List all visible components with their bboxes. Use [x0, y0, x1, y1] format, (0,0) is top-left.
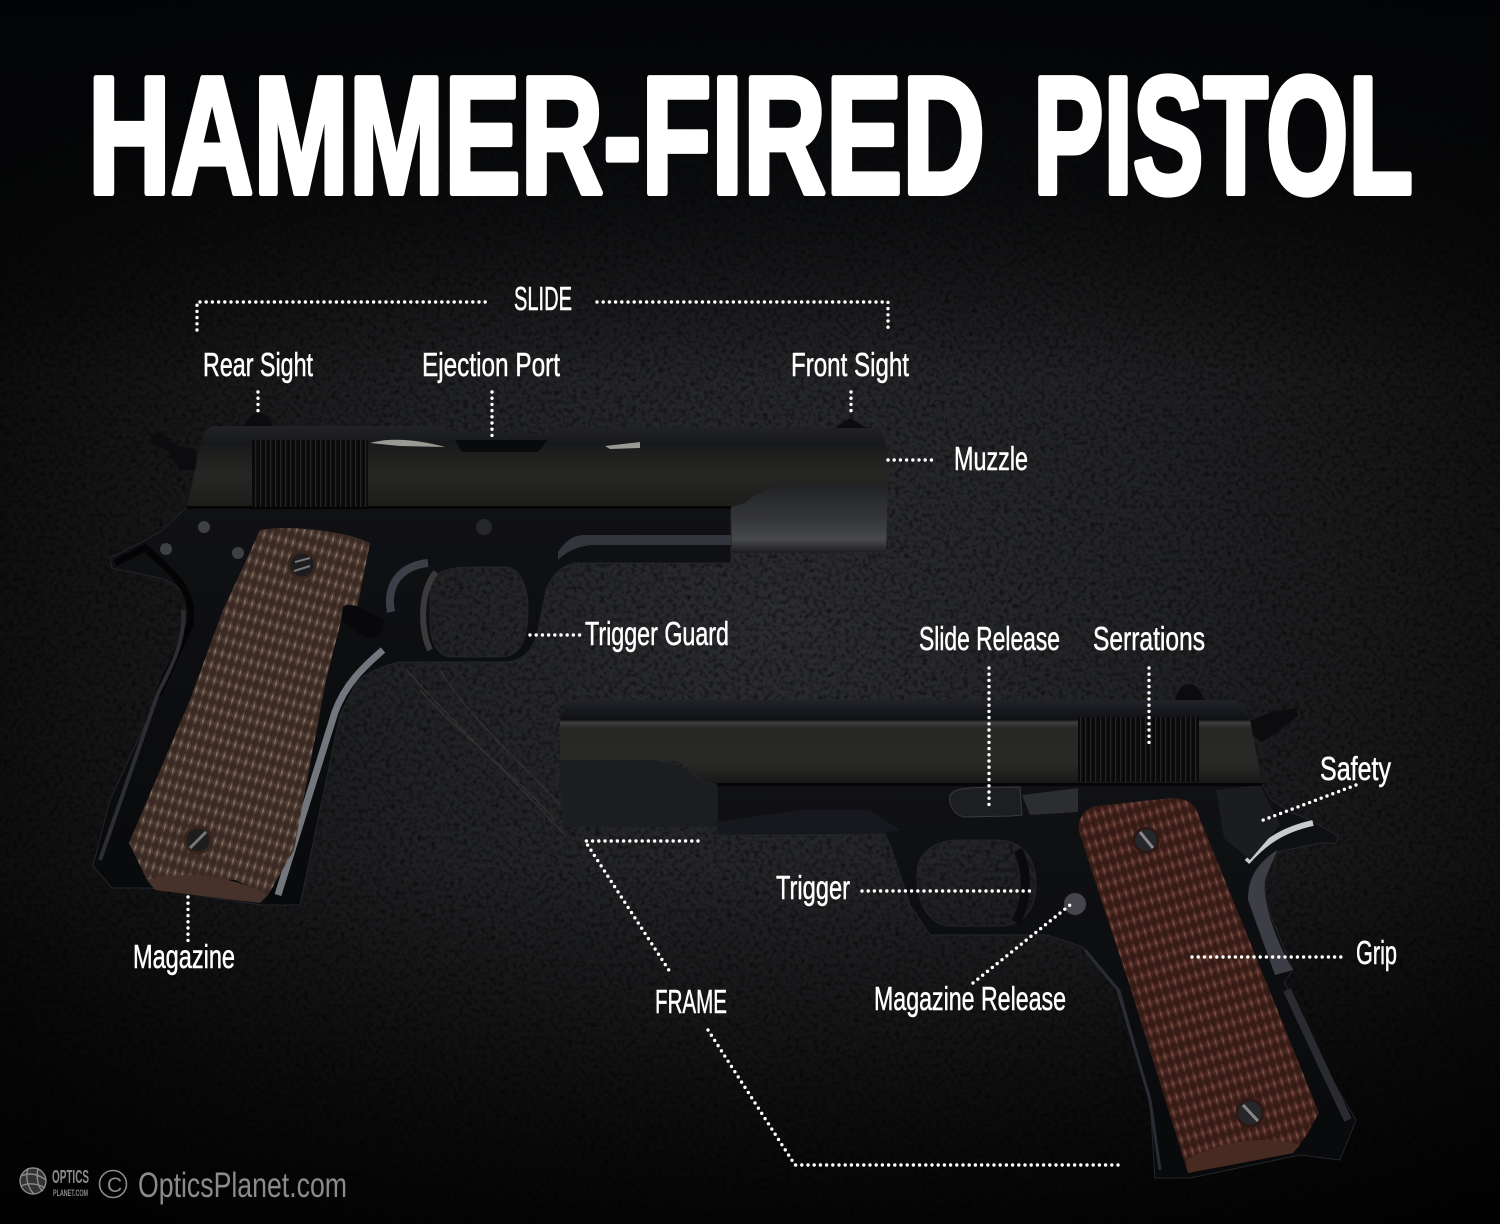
- rear sight: [245, 413, 273, 427]
- callout: magazine release: Magazine Release: [874, 980, 1066, 1017]
- callout: magazine release: [874, 905, 1070, 1017]
- mainspring band: [1248, 850, 1293, 975]
- trigger guard highlight: [390, 563, 428, 612]
- slide and frame seam: [717, 783, 1262, 786]
- thumb lever: [1022, 788, 1078, 815]
- callout: magazine: Magazine: [133, 938, 235, 975]
- callout: slide: SLIDE: [514, 280, 572, 317]
- callout: rear sight: Rear Sight: [203, 346, 313, 383]
- slide: [560, 700, 1262, 786]
- top grip screw: [1134, 828, 1158, 852]
- callout: trigger: Trigger: [776, 869, 850, 906]
- callout: safety: Safety: [1320, 750, 1391, 787]
- slide serrations: [1078, 717, 1199, 782]
- frame and grip body: [717, 783, 1356, 1178]
- brown checkered grip panel: [129, 528, 370, 895]
- slide stop catch: [342, 605, 383, 638]
- callout: front sight: [791, 346, 909, 416]
- rear sight: [1174, 684, 1205, 702]
- magazine release button: [1063, 892, 1087, 916]
- grip toe shading: [1186, 1140, 1300, 1173]
- icon: copyright mark: C: [107, 1174, 122, 1197]
- backstrap lower highlight: [1287, 990, 1348, 1120]
- trigger: [1016, 850, 1025, 922]
- callout: slide: [197, 280, 888, 330]
- frame rear plate: [1216, 785, 1280, 860]
- callout: frame: FRAME: [655, 983, 727, 1020]
- bottom grip screw: [1237, 1100, 1263, 1126]
- brown checkered grip panel: [1078, 798, 1319, 1173]
- left pistol: right side view: [93, 413, 890, 905]
- icon: copyright mark: [100, 1170, 126, 1198]
- front strap highlight: [1085, 950, 1160, 1170]
- front strap highlight: [278, 650, 383, 895]
- callout: trigger guard: Trigger Guard: [585, 615, 729, 652]
- grip safety shadow: [115, 548, 191, 695]
- callout: magazine: [133, 897, 235, 975]
- title: HAMMER-FIRED: [88, 43, 985, 229]
- callout: grip: Grip: [1356, 934, 1397, 971]
- top grip screw: [289, 552, 315, 578]
- safety chrome highlight: [1247, 823, 1313, 862]
- barrel bushing: [560, 760, 717, 827]
- slide: [187, 426, 890, 515]
- slide stop: [950, 787, 1022, 817]
- callout: serrations: Serrations: [1093, 620, 1205, 657]
- mainspring housing highlight: [100, 610, 183, 860]
- site name: OpticsPlanet.com: [138, 1166, 347, 1205]
- front sight: [835, 418, 867, 428]
- callout: front sight: Front Sight: [791, 346, 909, 383]
- right pistol: left side view: [560, 684, 1356, 1178]
- dust cover highlight: [558, 535, 731, 560]
- trigger: [423, 572, 436, 650]
- slide wear marks: [370, 440, 640, 449]
- frame rivets: [160, 519, 492, 559]
- hammer: [1240, 708, 1298, 742]
- callout: serrations: [1093, 620, 1205, 745]
- callout: slide release: Slide Release: [919, 620, 1060, 657]
- callout: ejection port: Ejection Port: [422, 346, 560, 383]
- hammer: [150, 432, 196, 470]
- bottom grip screw: [185, 827, 211, 853]
- barrel bushing: [731, 486, 888, 553]
- logo sub-wordmark: PLANET.COM: [53, 1188, 88, 1198]
- callout: muzzle: [888, 440, 1028, 477]
- callout: muzzle: Muzzle: [954, 440, 1028, 477]
- rear serrations: [252, 440, 368, 507]
- footer logo and copyright: [20, 1166, 347, 1205]
- callout: rear sight: [203, 346, 313, 416]
- logo wordmark: OPTICS: [52, 1167, 89, 1187]
- slide and frame seam: [187, 506, 731, 509]
- callout: frame: [585, 841, 1123, 1165]
- frame and grip body: [93, 507, 731, 905]
- dust cover highlight: [717, 810, 900, 834]
- callout: safety: [1258, 750, 1391, 822]
- ejection port: [455, 440, 548, 452]
- grip toe shading: [147, 875, 268, 903]
- icon: globe: [20, 1168, 46, 1194]
- callout: ejection port: [422, 346, 560, 437]
